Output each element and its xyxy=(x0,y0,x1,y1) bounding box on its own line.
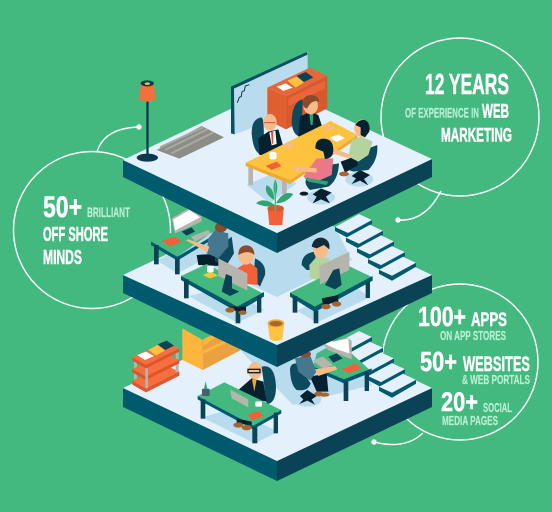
text: 50+ brilliant off shore minds: 50+ xyxy=(43,191,82,224)
text: 12 years of experience xyxy=(405,69,512,147)
text: 12 years of experience: OF EXPERIENCE IN xyxy=(405,105,479,121)
back right man xyxy=(292,95,323,137)
wall panel xyxy=(231,52,308,134)
rug xyxy=(157,126,224,159)
back left man xyxy=(252,114,283,155)
text: apps, websites, social: 20+ xyxy=(441,387,478,417)
waste basket xyxy=(268,319,284,341)
floor: bottom platform xyxy=(123,315,432,481)
front-left desk with worker xyxy=(181,245,265,323)
text: apps, websites, social: 100+ xyxy=(418,301,466,332)
boss at laptop xyxy=(198,362,281,443)
text: 50+ brilliant off shore minds: OFF SHORE xyxy=(43,224,108,246)
text: apps, websites, social: 50+ xyxy=(420,346,457,377)
floor: top platform xyxy=(123,87,432,253)
yellow cabinet xyxy=(182,320,240,370)
text: apps, websites, social xyxy=(418,301,530,428)
text: apps, websites, social: APPS xyxy=(471,310,507,331)
middle floor desks and staff xyxy=(151,208,373,341)
worker at right desk xyxy=(290,337,372,407)
orange cabinet xyxy=(267,68,327,129)
front-right desk with worker xyxy=(290,238,373,323)
lower stairs xyxy=(335,331,416,398)
top floor furniture and meeting xyxy=(137,52,377,225)
text: 50+ brilliant off shore minds xyxy=(43,191,130,269)
text: 12 years of experience: WEB xyxy=(482,102,509,123)
lower floor furniture and staff xyxy=(132,320,372,443)
potted plant xyxy=(256,179,293,225)
text: apps, websites, social: ON APP STORES xyxy=(440,328,506,343)
meeting table xyxy=(246,121,357,194)
table shadow xyxy=(247,172,297,203)
back-left desk with worker xyxy=(151,208,234,274)
text: apps, websites, social: SOCIAL xyxy=(483,400,512,415)
woman xyxy=(293,139,339,205)
text: 50+ brilliant off shore minds: BRILLIANT xyxy=(87,204,130,220)
boss desk shadow xyxy=(202,409,278,443)
text: 50+ brilliant off shore minds: MINDS xyxy=(43,247,82,269)
text: apps, websites, social: MEDIA PAGES xyxy=(442,413,498,428)
floor lamp xyxy=(137,80,158,162)
desk shadows xyxy=(157,247,370,323)
man in green shirt xyxy=(333,120,377,187)
red shelf xyxy=(132,341,179,392)
circle outlines and connectors xyxy=(14,38,539,445)
floor: middle platform xyxy=(123,202,432,367)
upper stairs xyxy=(335,214,416,281)
